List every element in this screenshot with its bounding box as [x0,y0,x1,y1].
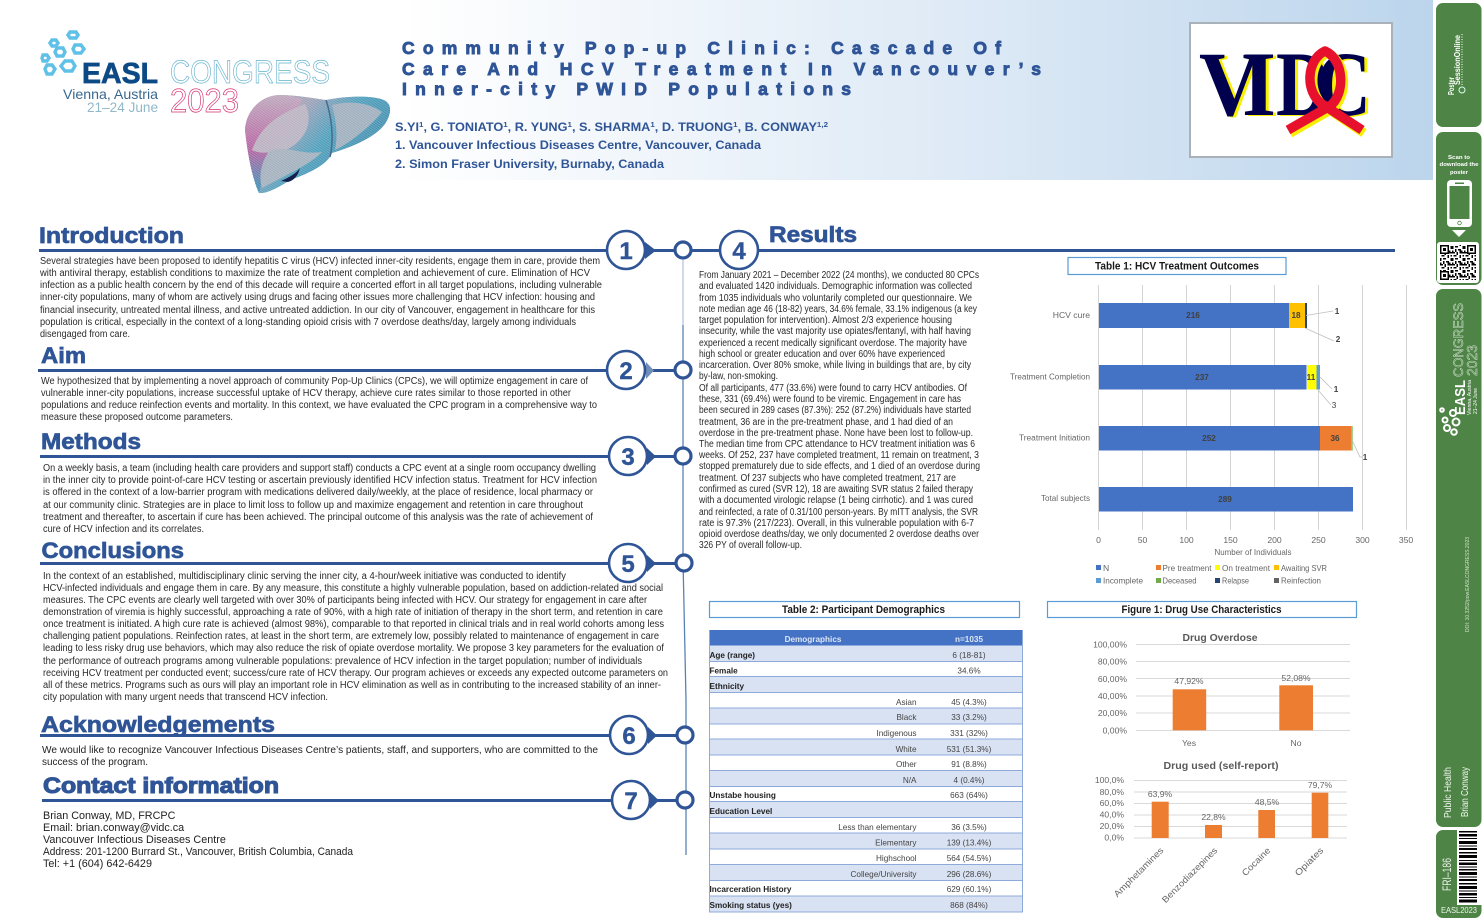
grid lines [1098,285,1406,530]
leader lines and outside labels: 3 [1332,401,1337,410]
contact details: Brian Conway, MD, FRCPC [43,810,176,822]
marker 2: 2 [619,358,633,385]
marker 5 [609,544,692,582]
body text: once treatment is initiated. A high cure rate is achieved (almost 98%), comparable to that reported in clinical trials and in real world cohorts among less [43,619,664,630]
leader lines and outside labels: 2 [1336,335,1341,344]
rows: Less than elementary [838,823,917,832]
yellow letter shadow: I [1245,34,1279,136]
body text: We hypothesized that by implementing a novel approach of community Pop-Up Clinics (CPCs), we will optimize engagement in care of [41,376,588,387]
VIDC logo [1190,23,1392,157]
DOI: DOI: 10.3252/pow.EASLCONGRESS.2023 [1465,537,1471,632]
y axis labels: 20,0% [1100,821,1124,831]
rows: Elementary [875,838,917,848]
bar: Amphetamines: Amphetamines [1112,845,1166,899]
section: Contact information [42,773,693,870]
connector line [690,249,1395,252]
body text: weeks. Of 252, 237 have completed treatment, 11 remain on treatment, 3 [698,450,979,461]
panel: Poster Session Online: Poster [1446,77,1456,95]
bar: Opiates [1293,780,1333,878]
marker 4: 4 [732,238,746,265]
body text: the performance of outreach programs among vulnerable populations: prevalence of HCV infection in the target population; number of individuals [43,656,642,667]
body text: populations and reduce reinfection events and mortality. In this context, we have evaluated the CPC program in a comprehensive way to [41,400,597,411]
bar: No: No [1290,738,1302,748]
congress code: EASL2023 [1441,905,1477,915]
body text: Several strategies have been proposed to identify hepatitis C virus (HCV) infected inner-city residents, engage them in care, provide them [40,256,600,267]
body text: is offered in the context of a low-barrier program with medications delivered daily/weekly, at the place of residence, local pharmacy or [43,487,594,498]
y axis labels: 100,0% [1095,775,1124,785]
body text: challenging patient populations. Reinfection rates, at least in the short term, are extremely low, possibly related to maintenance of engagement in care [43,631,659,642]
y axis labels: 0,0% [1104,832,1124,842]
connector line [42,799,686,802]
marker 2 [607,351,691,389]
section: Conclusions [40,538,692,703]
bar: Cocaine [1240,797,1280,878]
body text: confirmed as cured (SVR 12), 18 are awaiting SVR status 2 failed therapy [699,484,973,495]
section: Aim [38,343,691,423]
body text: treatment and thereafter, to ascertain if cure has been achieved. The principal outcome of this analysis was the rate of achievement of [43,512,593,523]
bar: Treatment Initiation: 36 [1330,434,1340,443]
y axis labels: 60,00% [1098,674,1127,684]
marker 5: 5 [621,551,635,578]
body text: 326 PY of overall follow-up. [699,540,802,551]
body text: insecurity, while the vast majority use opiates/fentanyl, with half having [699,326,971,337]
bar: Treatment Completion: 11 [1307,373,1316,382]
authors and affiliations [395,120,828,171]
row stripes [709,646,1022,912]
body text: inner-city populations, many of whom are actively using drugs and facing other issues more challenging that HCV infection: housing and [40,292,595,303]
panel: congress info [1436,289,1482,827]
heading: Results [769,222,857,247]
bar: Cocaine: 48,5% [1255,797,1280,807]
bar: Amphetamines: 63,9% [1148,789,1173,799]
category labels [1010,310,1090,503]
rows: College/University [851,870,917,879]
body text: opioid overdose deaths/day, we only documented 2 overdose deaths over [699,529,980,540]
bar: No: 52,08% [1281,673,1311,683]
rows: 629 (60.1%) [947,885,992,894]
icon: hexagon cluster [42,32,84,74]
y axis labels [1095,775,1124,842]
Table 2 title box: Table 2: Participant Demographics [782,604,945,616]
QR code [1437,242,1479,283]
body text: and reinfected, a rate of 0.31/100 person-years. By mITT analysis, the SVR [699,507,978,518]
body text [43,571,668,703]
body text: been secured in 289 cases (87.3%): 252 (87.2%) individuals have started [699,405,971,416]
dates: 21–24 June [87,99,158,115]
x axis labels: 350 [1399,535,1413,545]
authors and affiliations: 1 [568,120,572,129]
rows: 4 (0.4%) [954,776,985,785]
body text: disengaged from care. [40,329,130,340]
bar: Yes: 47,92% [1174,676,1204,686]
body text: these, 331 (69.4%) were found to be viremic. Engagement in care has [699,394,961,405]
panel: poster code [1436,830,1482,918]
EASL wordmark: EASL [82,58,158,90]
navy letters: C [1316,33,1371,135]
bar: Total subjects: 289 [1218,495,1232,504]
x axis labels: 250 [1311,535,1326,545]
rows: 33 (3.2%) [951,713,987,722]
title [402,38,1041,99]
leader lines and outside labels: 1 [1334,385,1339,394]
rows: 564 (54.5%) [947,854,992,863]
bar: Opiates: 79,7% [1308,780,1333,790]
connector line [38,369,683,372]
marker 3: 3 [621,444,635,471]
bar: Treatment Initiation: 252 [1202,434,1216,443]
yellow letter shadow: D [1279,34,1333,136]
rows: Unstabe housing [710,791,776,800]
row rules and outline [709,630,1022,912]
icon: liver illustration [245,95,390,193]
rows [710,651,992,910]
body text: city population with many urgent needs that transcend HCV infection. [43,692,328,703]
body text: target population for intervention). Almost 2/3 experience housing [699,315,952,326]
scan text: poster [1450,170,1469,176]
authors and affiliations: 1 [503,120,508,129]
contact details: Vancouver Infectious Diseases Centre [43,834,226,846]
bar: Benzodiazepines: 22,8% [1201,812,1226,822]
heading: Contact information [43,773,279,798]
body text: vulnerable inner-city populations, increase successful uptake of HCV therapy, achieve cure rates similar to those reported in other [41,388,572,399]
body text: infection as a public health concern by the end of this decade will require a concerted effort in all target populations, including vulnerable [40,280,602,291]
body text: at our community clinic. Strategies are in place to limit loss to follow up and maximize engagement and retention in care throughout [43,500,583,511]
scan text [1440,155,1478,176]
rows: Female [710,666,738,676]
category labels: Treatment Initiation [1019,432,1090,442]
rotated location: Vienna, Austria [1467,379,1473,415]
body text: measures. The CPC events are clearly well targeted with over 30% of participants being infected with HCV. Our strategy for engagement in care after [43,595,648,606]
leader lines and outside labels: 1 [1335,307,1340,316]
body text [698,270,980,551]
header row [709,630,1022,646]
marker 6: 6 [622,723,636,750]
chart title: Drug used (self-report) [1164,760,1278,772]
body text: experienced a recent medically significant overdose. The majority have [699,338,967,349]
body text: from 1035 individuals who voluntarily completed our questionnaire. We [699,293,972,304]
rows: Incarceration History [710,885,792,894]
x axis labels [1096,535,1413,557]
y axis labels: 0,00% [1103,726,1127,736]
EASL Congress logo [42,32,330,119]
legend [1096,563,1327,586]
rotated CONGRESS wordmark: CONGRESS [1451,303,1466,377]
panel: scan to download [1436,132,1482,285]
leader lines and outside labels: 1 [1363,453,1368,462]
legend: Reinfection [1281,576,1321,586]
marker 4 [720,231,758,269]
bar chart: HCV treatment outcomes [1010,285,1413,586]
category labels: Total subjects [1041,493,1090,503]
marker 6 [610,716,693,754]
body text: HCV-infected individuals and engage them in care. By any measure, this constitute a highly vulnerable population, based on addiction-related and social [43,583,663,594]
bar: Amphetamines [1112,789,1173,899]
rows: 868 (84%) [950,901,988,910]
rows: 45 (4.3%) [951,698,987,707]
leader lines and outside labels [1305,307,1368,462]
body text: measure these proposed outcome parameters. [41,412,233,423]
bar: Treatment Completion [1099,365,1320,390]
rows: Highschool [876,854,917,863]
connector line [40,734,685,737]
body text: stopped prematurely due to side effects, and 1 died of an overdose during [699,461,980,472]
contact details: Address: 201-1200 Burrard St., Vancouver, British Columbia, Canada [43,846,353,858]
rows: 296 (28.6%) [947,870,992,879]
authors and affiliations: 1 [733,120,738,129]
chart title: Drug Overdose [1182,632,1258,644]
connector line [39,249,683,252]
bar: Total subjects [1099,487,1353,512]
section: Methods [40,429,691,535]
rows: 663 (64%) [950,791,988,800]
bar: Benzodiazepines: Benzodiazepines [1160,845,1220,905]
authors and affiliations: 2. Simon Fraser University, Burnaby, Canada [395,157,664,171]
rows: White [896,745,917,754]
section: Acknowledgements [40,712,693,768]
icon: smartphone [1447,180,1472,227]
y axis labels: 40,00% [1098,691,1127,701]
x axis labels: 150 [1223,535,1238,545]
body text: rate is 97.3% (217/223). Overall, in this vulnerable population with 6-7 [699,518,974,529]
navy letters: V [1199,33,1261,135]
bar: Yes: Yes [1182,738,1196,748]
heading: Conclusions [42,538,184,563]
rows: Education Level [710,807,772,816]
x axis labels: 200 [1267,535,1282,545]
rotated date: 21–24 June [1473,388,1479,414]
marker 7: 7 [624,788,638,815]
marker 1 [607,231,691,269]
Figure 1 title box: Figure 1: Drug Use Characteristics [1122,604,1282,616]
rows: 531 (51.3%) [947,745,992,754]
bar: Treatment Initiation [1099,426,1353,450]
body text: incarceration. Over 80% smoke, while living in buildings that are, by city [699,360,971,371]
grid lines [1134,780,1347,838]
body text [42,744,598,768]
authors and affiliations: S.YI [395,120,418,134]
y axis labels [1093,640,1127,736]
heading: Methods [41,429,141,454]
contact details: Email: brian.conway@vidc.ca [43,822,184,834]
CONGRESS wordmark: CONGRESS [170,54,330,90]
Table 2 title box [710,602,1020,618]
body text [39,256,602,340]
body text: with a documented virologic relapse (1 being cirrhotic). and 1 was cured [698,495,973,506]
legend: N [1103,563,1109,573]
body text [41,376,597,423]
body text: high school or greater education and over 60% have experienced [699,349,945,360]
body text: and evaluated 1420 individuals. Demographic information was collected [699,281,972,292]
body text: all of these metrics. Programs such as ours will play an important role in HCV elimination as well as in contributing to the increased stability of an inner- [43,680,661,691]
rows: Indigenous [876,729,916,738]
body text: overdose in the pre-treatment phase. None have been lost to follow-up. [699,428,973,439]
rotated EASL: EASL [1452,380,1469,415]
topic: Public Health [1443,767,1454,818]
bar: HCV cure: 216 [1186,311,1200,320]
body text: leading to less risky drug use behaviors, which may also reduce the risk of opiate overdose mortality. We propose 3 key parameters for the evaluation of [43,643,664,654]
rows: 6 (18-81) [952,651,986,660]
title: Community Pop-up Clinic: Cascade Of [402,38,1001,58]
bar: Cocaine: Cocaine [1240,845,1272,878]
header row: n=1035 [955,635,983,644]
bar chart: drug used [1095,760,1347,905]
Table 1 title box: Table 1: HCV Treatment Outcomes [1095,260,1259,272]
body text: treatment. Of 237 subjects who have completed treatment, 217 are [699,473,956,484]
body text: in the inner city to provide point-of-care HCV testing or ascertain previously identified HCV infection status. Treatment for HCV infection [43,475,597,486]
body text: cure of HCV infection and its correlates. [43,524,204,535]
x axis labels: 50 [1138,535,1147,545]
x axis labels: 0 [1096,535,1101,545]
body text: by-law, non-smoking. [699,371,778,382]
panel: Poster Session Online [1436,3,1482,127]
authors and affiliations: , R. YUNG [508,120,568,134]
yellow letter shadow [1202,34,1374,136]
bar chart: drug overdose [1093,632,1350,748]
rows: Age (range) [710,651,755,660]
header row: Demographics [785,635,842,644]
body text: success of the program. [42,756,148,768]
year: 2023 [170,82,239,119]
body text: Of all participants, 477 (33.6%) were found to carry HCV antibodies. Of [699,383,967,394]
scan text: Scan to [1448,155,1471,161]
body text: From January 2021 – December 2022 (24 months), we conducted 80 CPCs [699,270,979,281]
sidebar [1436,3,1482,918]
section: Results [690,222,1395,551]
icon: down arrow [1452,230,1466,237]
authors and affiliations: 1 [650,120,655,129]
title: Inner-city PWID Populations [402,79,851,99]
y axis labels: 60,0% [1100,798,1124,808]
bar: Benzodiazepines [1160,812,1226,905]
body text: note median age 46 (18-82) years, 34.6% female, 33.1% indigenous (a key [699,304,977,315]
authors and affiliations: , S. SHARMA [572,120,651,134]
barcode [1459,831,1477,902]
rows: 34.6% [957,666,981,676]
authors and affiliations: , G. TONIATO [423,120,503,134]
body text: treatment, 36 are in the pre-treatment phase, and 1 had died of an [699,417,953,428]
marker 3 [609,437,691,475]
contact details [43,810,353,870]
bar: HCV cure: 18 [1291,311,1301,320]
bar: HCV cure [1099,303,1307,328]
y axis labels: 100,00% [1093,640,1127,650]
body text: demonstration of viremia is highly successful, approaching a rate of 90%, with a high rate of initiation of therapy in the short term, and retention in care [43,607,663,618]
rows: Other [896,760,917,769]
legend: On treatment [1222,563,1271,573]
bar: Opiates: Opiates [1293,845,1326,878]
poster number: FRI–186 [1440,858,1454,891]
heading: Introduction [39,223,184,248]
rotated year: 2023 [1465,345,1481,376]
x axis labels: 100 [1179,535,1194,545]
red ribbon [1290,53,1364,133]
y axis labels: 80,00% [1098,656,1127,666]
marker 7 [612,781,693,819]
authors and affiliations: 1,2 [817,120,828,129]
rows: Black [896,713,917,722]
y axis labels: 40,0% [1100,810,1124,820]
rows: N/A [903,776,917,785]
rows: Asian [896,698,917,707]
rows: 139 (13.4%) [947,838,992,848]
body text: The median time from CPC attendance to HCV treatment initiation was 6 [699,439,975,450]
authors and affiliations: 1. Vancouver Infectious Diseases Centre, Vancouver, Canada [395,138,761,152]
authors and affiliations: 1 [419,120,423,129]
legend: Pre treatment [1162,563,1212,573]
heading: Acknowledgements [41,712,275,737]
rows: Smoking status (yes) [710,901,792,910]
x axis labels: Number of Individuals [1214,547,1292,557]
authors and affiliations: , D. TRUONG [655,120,733,134]
table: participant demographics [709,630,1022,912]
connector line [40,562,685,565]
navy letters: D [1276,33,1330,135]
body text: In the context of an established, multidisciplinary clinic serving the inner city, a 4-hour/week initiative was conducted to identify [43,571,566,582]
timeline vertical line [682,260,684,325]
Table 1 title box [1068,258,1286,274]
legend: Relapse [1222,576,1249,586]
bar: No [1279,673,1313,748]
panel: Poster Session Online: SessionOnline [1452,35,1462,85]
rows: Ethnicity [710,682,745,691]
location: Vienna, Austria [63,86,158,102]
Figure 1 title box [1048,602,1356,618]
body text: financial insecurity, untreated mental illness, and active untreated addiction. In our city of Vancouver, engagement in healthcare for this [40,305,595,316]
navy letters [1199,33,1371,135]
heading: Aim [41,343,86,368]
legend: Deceased [1162,576,1197,586]
connector line [40,455,683,458]
section: Introduction [39,223,691,340]
y axis labels: 20,00% [1098,708,1127,718]
rows: 36 (3.5%) [951,823,987,832]
icon: rotated hexagons [1440,408,1460,435]
category labels: Treatment Completion [1010,372,1090,382]
category labels: HCV cure [1053,310,1090,320]
marker 1: 1 [619,238,633,265]
yellow letter shadow: V [1202,34,1264,136]
header background gradient [0,0,1433,180]
y axis labels: 80,0% [1100,787,1124,797]
rows: 331 (32%) [950,729,988,738]
body text [43,463,597,535]
body text: We would like to recognize Vancouver Infectious Diseases Centre’s patients, staff, and supporters, who are committed to the [42,744,598,756]
bar: Yes [1173,676,1206,748]
author: Brian Conway [1460,767,1471,817]
authors and affiliations: , B. CONWAY [738,120,817,134]
yellow letter shadow: C [1319,34,1374,136]
legend: Incomplete [1103,576,1143,586]
rows: 91 (8.8%) [951,760,987,769]
navy letters: I [1242,33,1276,135]
body text: receiving HCV treatment per conducted event; success/cure rate of HCV therapy. Our program achieves or exceeds any expected outcome parameters on [43,668,668,679]
contact details: Tel: +1 (604) 642-6429 [43,858,152,870]
grid lines [1136,644,1350,730]
body text: On a weekly basis, a team (including health care providers and support staff) conducts a CPC event at a single room occupancy dwelling [43,463,596,474]
bar: Treatment Completion: 237 [1195,373,1209,382]
x axis labels: 300 [1355,535,1370,545]
body text: population is critical, especially in the context of a long-standing opioid crisis with 7 overdose deaths/day, largely among individuals [40,317,576,328]
legend: Awaiting SVR [1281,563,1327,573]
scan text: download the [1440,162,1478,168]
title: Care And HCV Treatment In Vancouver’s [402,59,1041,79]
body text: with antiviral therapy, establish conditions to maximize the rate of treatment completion and achievement of cure. Elimination of HCV [39,268,590,279]
